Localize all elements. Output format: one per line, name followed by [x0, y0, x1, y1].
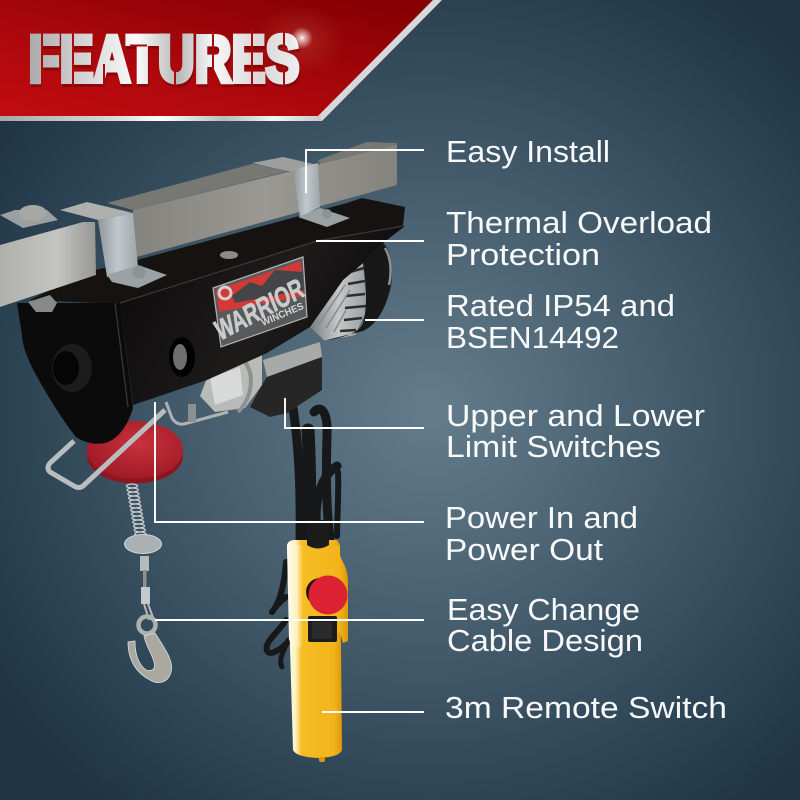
- black hoist side plate: [17, 303, 133, 444]
- hex bolt: [28, 295, 57, 312]
- label: Rated IP54 and BSEN14492: [446, 288, 675, 355]
- feature labels: [445, 134, 727, 725]
- logo word WARRIOR: WARRIOR: [211, 272, 308, 347]
- right mounting bracket: [252, 157, 350, 227]
- pendant body: [287, 540, 342, 758]
- left bolt plate: [0, 205, 58, 228]
- label: Easy Change Cable Design: Easy Change: [447, 592, 640, 627]
- leader: thermal overload: [316, 240, 424, 242]
- leader lines: [155, 150, 424, 712]
- label: Thermal Overload Protection: Protection: [446, 237, 600, 272]
- hoist illustration: [0, 142, 405, 762]
- label: 3m Remote Switch: 3m Remote Switch: [445, 690, 727, 725]
- label: Upper and Lower Limit Switches: Upper and Lower: [446, 398, 705, 433]
- red stop button: [306, 576, 348, 614]
- label: Easy Change Cable Design: Cable Design: [447, 623, 643, 658]
- cable port: [169, 337, 195, 377]
- black top plate: [30, 198, 405, 304]
- power cables: [267, 408, 338, 667]
- logo mark: [219, 287, 231, 299]
- label: Power In and Power Out: [445, 500, 638, 567]
- motor fins: [310, 263, 367, 341]
- leader: cable: [155, 619, 424, 621]
- drum and shackle: [166, 355, 262, 424]
- label: Rated IP54 and BSEN14492: BSEN14492: [446, 320, 619, 355]
- lifting hook: [128, 616, 172, 683]
- motor end cover: [323, 243, 392, 341]
- pendant remote: [287, 520, 348, 762]
- left mounting bracket: [60, 202, 167, 288]
- label: Thermal Overload Protection: [446, 205, 712, 272]
- heading: FEATURES: FEATURES: [28, 22, 300, 96]
- top screw: [220, 251, 238, 259]
- leader: limit switches: [285, 398, 424, 428]
- label: Power In and Power Out: Power In and: [445, 500, 638, 535]
- leader: remote: [322, 711, 424, 713]
- rocker switch: [308, 616, 337, 642]
- washer: [124, 534, 162, 554]
- brand logo badge: [211, 257, 308, 347]
- leader: power: [155, 402, 424, 522]
- square beam: [0, 142, 397, 307]
- icon: light glint: [291, 27, 313, 49]
- spring: [126, 484, 146, 536]
- red banner panel: [0, 0, 433, 116]
- label: Upper and Lower Limit Switches: [446, 398, 705, 464]
- leader: easy install: [306, 150, 424, 193]
- label: Easy Install: Easy Install: [446, 134, 610, 169]
- logo word WINCHES: WINCHES: [260, 301, 306, 329]
- heading: FEATURES: FEATURES: [30, 24, 300, 98]
- side plate roller: [52, 344, 92, 392]
- limit switch wire loop: [48, 410, 165, 488]
- cable gland: [307, 520, 329, 548]
- label: Upper and Lower Limit Switches: Limit Switches: [446, 429, 661, 464]
- logo red field: [216, 261, 304, 312]
- header banner: [0, 0, 442, 121]
- steel cable and ferrules: [140, 556, 154, 620]
- limit switch box: [250, 342, 322, 417]
- black hoist front housing: [120, 226, 405, 405]
- label: Easy Change Cable Design: [447, 592, 643, 658]
- label: Power In and Power Out: Power Out: [445, 532, 603, 567]
- red stop disc: [87, 421, 183, 484]
- pendant bottom nub: [319, 757, 325, 762]
- leader: rated: [365, 319, 424, 321]
- label: Rated IP54 and BSEN14492: Rated IP54 and: [446, 288, 675, 323]
- label: Thermal Overload Protection: Thermal Overload: [446, 205, 712, 240]
- pendant cover: [287, 545, 348, 648]
